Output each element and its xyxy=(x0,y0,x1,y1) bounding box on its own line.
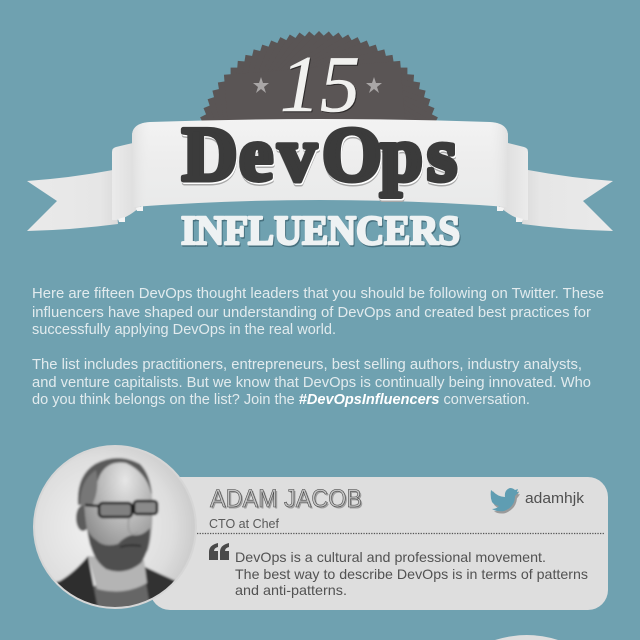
name: Adam Jacob: ADAM JACOB xyxy=(210,485,362,513)
hair xyxy=(78,458,152,505)
icon: twitter bird xyxy=(491,488,520,513)
panel: Adam Jacob profile xyxy=(33,445,608,620)
nose xyxy=(127,518,130,532)
ribbon left tail xyxy=(27,170,118,231)
heading: INFLUENCERS: INFLUENCERS xyxy=(181,207,460,253)
neck xyxy=(88,556,147,591)
intro paragraph one: influencers have shaped our understanding of DevOps and created best practices for xyxy=(32,305,591,321)
card background xyxy=(150,477,608,610)
intro paragraph one: successfully applying DevOps in the real world. xyxy=(32,322,336,338)
jacket xyxy=(56,556,98,605)
ribbon left fold xyxy=(112,143,140,220)
job title: CTO at Chef xyxy=(209,517,280,531)
ear xyxy=(76,505,90,531)
portrait photo xyxy=(36,457,194,607)
heading: DevOps: DevOps xyxy=(183,114,458,200)
ribbon xyxy=(27,111,613,231)
glasses xyxy=(85,501,157,517)
badge: serrated semicircle with 15 xyxy=(200,31,438,120)
heading: DevOps: DevOps xyxy=(182,111,457,197)
heading: DevOps: DevOps xyxy=(183,112,458,198)
ribbon curl shadows xyxy=(118,206,523,222)
intro paragraph two xyxy=(32,357,591,408)
twitter handle: adamhjk xyxy=(525,491,585,507)
ribbon right fold xyxy=(500,143,528,220)
name: Adam Jacob: ADAM JACOB xyxy=(212,486,364,514)
number 15: 15 xyxy=(281,42,361,130)
intro paragraph two: The list includes practitioners, entrepreneurs, best selling authors, industry analysts, xyxy=(32,357,582,373)
quote text xyxy=(235,549,588,598)
quote text: DevOps is a cultural and professional movement. xyxy=(235,549,546,565)
intro paragraph two: do you think belongs on the list? Join the #DevOpsInfluencers conversation. xyxy=(32,392,530,408)
quote text: The best way to describe DevOps is in terms of patterns xyxy=(235,566,588,582)
heading: INFLUENCERS: INFLUENCERS xyxy=(182,208,461,254)
ribbon right tail xyxy=(522,170,613,231)
icon: left star xyxy=(253,77,269,93)
icon: right star xyxy=(366,77,382,93)
mouth xyxy=(120,545,141,547)
intro paragraph two: and venture capitalists. But we know that DevOps is continually being innovated. Who xyxy=(32,375,591,391)
icon: quotation mark xyxy=(209,543,229,560)
quote text: and anti-patterns. xyxy=(235,582,347,598)
number 15: 15 xyxy=(280,41,360,129)
head xyxy=(83,462,154,552)
portrait frame xyxy=(33,445,197,609)
intro paragraph one: Here are fifteen DevOps thought leaders that you should be following on Twitter. These xyxy=(32,286,604,302)
next profile portrait (cropped) xyxy=(495,635,558,640)
intro paragraph one xyxy=(32,286,604,338)
shirt xyxy=(92,582,151,607)
ribbon main band xyxy=(132,119,508,207)
beard xyxy=(88,528,150,571)
